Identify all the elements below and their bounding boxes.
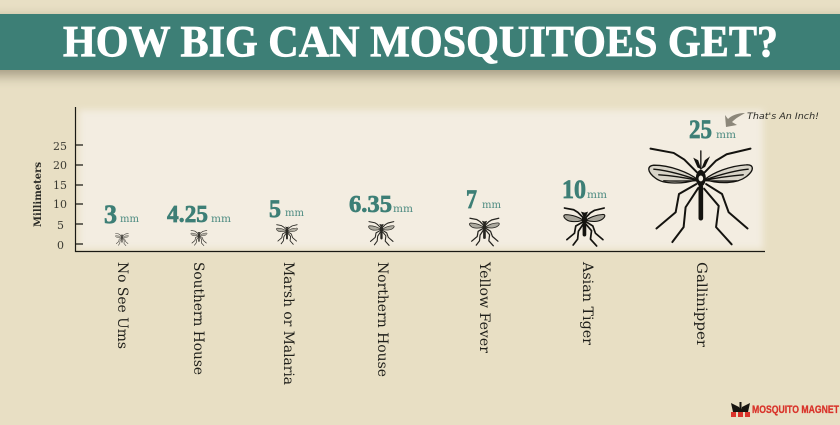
column: Northern House: mm	[393, 204, 414, 215]
y axis: 10	[53, 198, 67, 211]
column: No See Ums	[104, 200, 140, 349]
y axis	[53, 107, 765, 252]
chart panel	[79, 110, 763, 249]
column: No See Ums: mm	[120, 214, 140, 225]
column: Southern House: mm	[211, 214, 232, 225]
column: Northern House	[349, 192, 414, 377]
column: No See Ums: No See Ums	[114, 262, 130, 349]
column: Yellow Fever: 7	[466, 185, 477, 214]
callout: that's an inch: That's An Inch!	[747, 112, 819, 122]
y axis: 0	[57, 239, 64, 252]
column: Asian Tiger: mm	[587, 190, 608, 201]
column: Marsh or Malaria	[269, 196, 305, 385]
column: Yellow Fever: mm	[482, 200, 502, 211]
logo: mosquito magnet	[731, 402, 839, 417]
column: Southern House: Southern House	[190, 262, 206, 375]
column: Southern House	[167, 202, 232, 375]
column: Northern House: Northern House	[374, 262, 390, 377]
column: Gallinipper	[649, 115, 752, 347]
column: Gallinipper: mm	[716, 130, 737, 141]
column: Yellow Fever	[466, 185, 502, 353]
column: Asian Tiger: 10	[562, 175, 586, 204]
column: Gallinipper: 25	[689, 115, 712, 144]
title: HOW BIG CAN MOSQUITOES GET?	[63, 17, 778, 66]
column: Southern House: 4.25	[167, 202, 208, 228]
icon: logo mosquito	[731, 402, 750, 417]
column: Yellow Fever: Yellow Fever	[476, 261, 492, 353]
axis title: Millimeters	[33, 162, 44, 227]
column: Asian Tiger: Asian Tiger	[579, 261, 595, 345]
title banner	[0, 14, 840, 76]
column: Marsh or Malaria: Marsh or Malaria	[280, 262, 296, 385]
callout: that's an inch	[725, 112, 819, 127]
column: Marsh or Malaria: mm	[285, 208, 305, 219]
y axis: 25	[53, 140, 67, 153]
column: Northern House: 6.35	[349, 192, 392, 218]
y axis: 15	[53, 179, 67, 192]
column: Gallinipper: Gallinipper	[693, 262, 709, 347]
y axis: 20	[53, 159, 67, 172]
y axis: 5	[57, 219, 64, 232]
column: Asian Tiger	[562, 175, 608, 345]
column: No See Ums: 3	[104, 200, 117, 229]
column: Marsh or Malaria: 5	[269, 196, 281, 223]
